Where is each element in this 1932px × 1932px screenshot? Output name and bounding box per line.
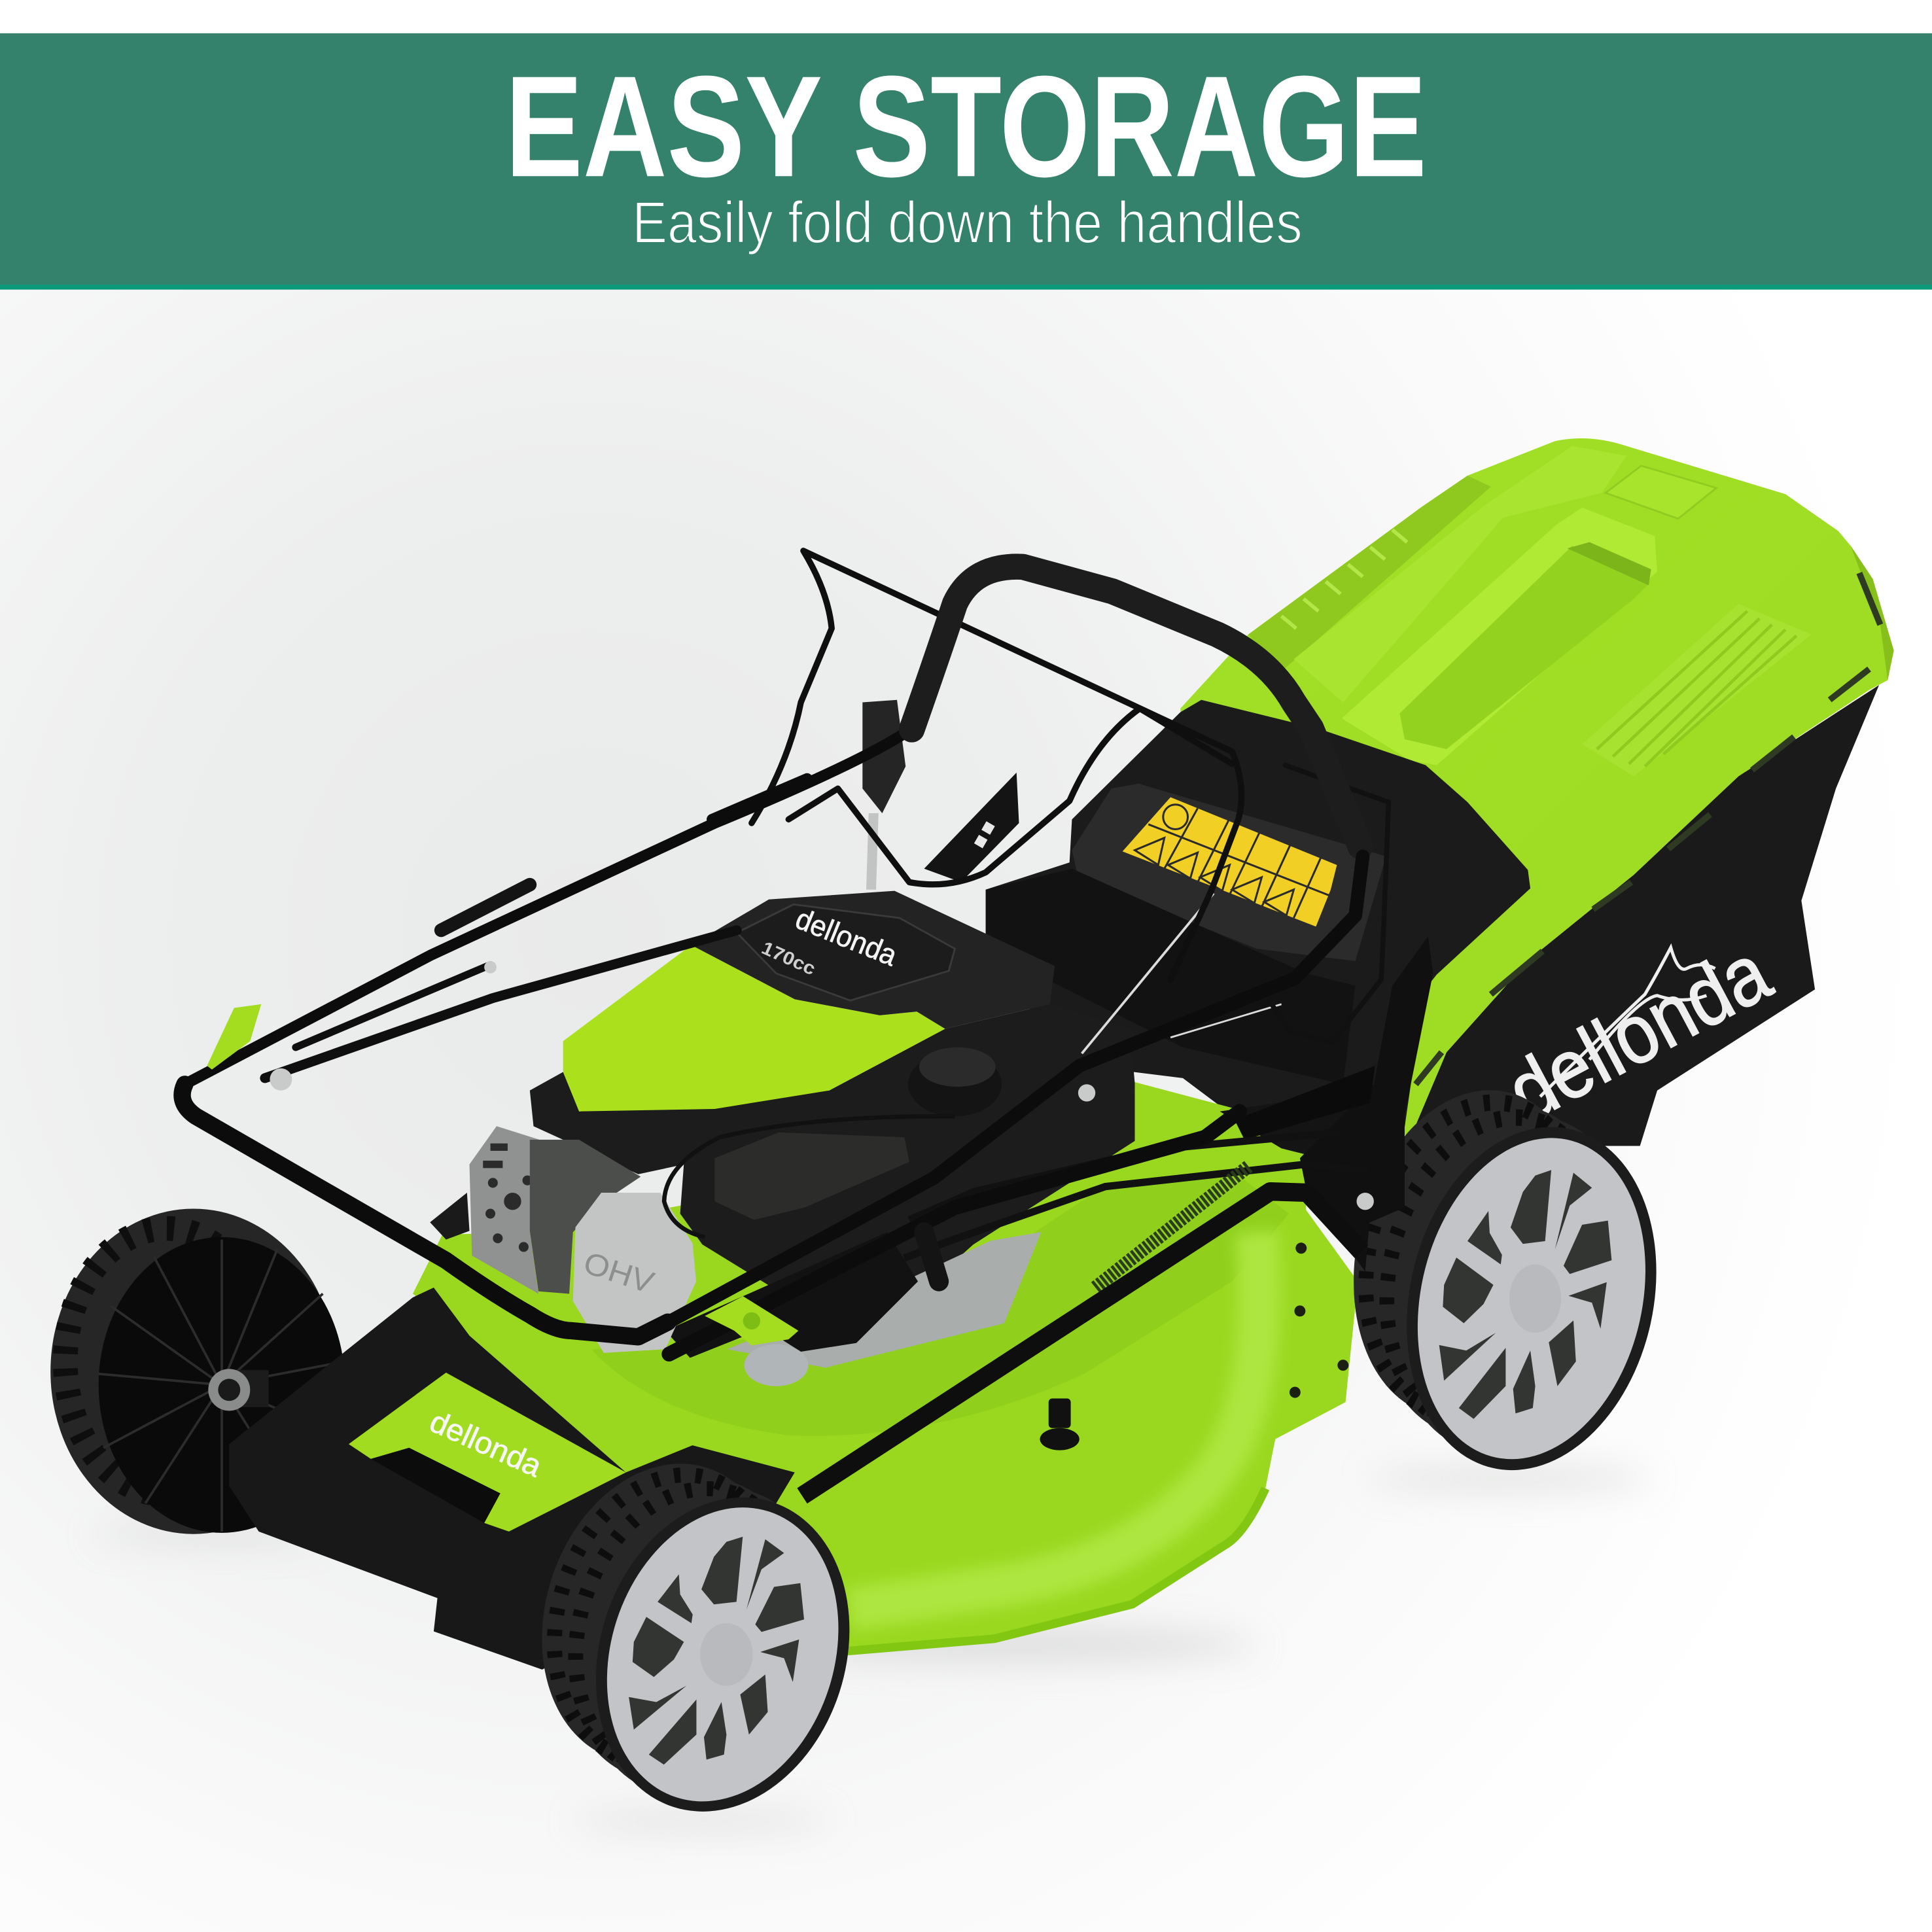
hood capacity label: 170cc	[759, 937, 819, 979]
warning sticker	[1123, 797, 1337, 926]
control box	[665, 1232, 918, 1358]
operator bail	[752, 551, 1242, 979]
padded top bar	[912, 567, 1360, 847]
bumper logo: dellonda	[425, 1403, 548, 1484]
bag lid tab	[1606, 466, 1716, 519]
grass bag	[1180, 438, 1894, 1146]
front tyre	[504, 1433, 867, 1829]
water port	[1040, 1399, 1080, 1450]
rear sidewall	[1368, 1091, 1695, 1507]
adjuster stalk	[862, 700, 905, 813]
lower handle loop	[182, 1084, 668, 1337]
front spoke windows	[629, 1537, 804, 1765]
drive bail	[788, 709, 1232, 885]
engine	[430, 891, 1135, 1386]
handle latch	[441, 885, 530, 930]
deck holes	[1290, 1242, 1348, 1398]
lime levers	[207, 1004, 798, 1346]
small front wheel	[53, 1211, 345, 1533]
rear tyre	[1317, 1057, 1674, 1489]
front right wheel	[504, 1433, 889, 1845]
engine: OHV	[580, 1245, 659, 1300]
header banner	[0, 0, 1932, 290]
bag side shade	[1851, 546, 1894, 680]
rear hub cap	[1509, 1265, 1561, 1333]
bag vents	[1582, 604, 1811, 776]
rear hub	[1382, 1105, 1681, 1492]
engine lime cover	[563, 945, 945, 1112]
inner side rail A	[664, 856, 1363, 1325]
handle recess	[1399, 546, 1650, 749]
bag slots	[1416, 573, 1880, 1084]
handle arm plate	[1235, 1066, 1375, 1140]
outer wire loop	[1269, 765, 1388, 1042]
front bumper	[229, 1288, 795, 1670]
rear tread	[1331, 1071, 1640, 1460]
folded handle assembly	[182, 551, 1388, 1354]
bumper hollow	[371, 1448, 501, 1523]
engine base	[530, 1004, 1135, 1343]
ground shadow	[92, 1467, 1651, 1830]
chassis bracket and side plates	[862, 700, 1433, 1272]
upper handle rail	[184, 721, 922, 1084]
front sidewall	[557, 1464, 889, 1845]
bag logo: dellonda	[1492, 925, 1785, 1140]
logo swoosh	[1540, 947, 1715, 1097]
rear spoke windows	[1439, 1170, 1611, 1419]
subtitle: Easily fold down the handles	[632, 190, 1303, 256]
bolts	[270, 961, 1374, 1210]
deck	[413, 1082, 1358, 1651]
bag lime shell	[1180, 438, 1894, 1140]
bag ribbed side	[1248, 476, 1491, 671]
lower deck bar	[802, 1191, 1361, 1496]
front tread	[519, 1446, 832, 1802]
OHV block	[573, 1193, 696, 1353]
front hub cap	[700, 1623, 753, 1686]
air filter box	[714, 1133, 909, 1220]
rear black housing	[986, 700, 1530, 1140]
bag carry handle	[1342, 508, 1657, 765]
mower	[53, 438, 1894, 1845]
bag mesh collector	[1409, 685, 1879, 1146]
deck well	[591, 1170, 1289, 1436]
bag upper trough	[1293, 446, 1626, 702]
clamp arm	[712, 779, 807, 819]
hood panel	[737, 904, 955, 1000]
housing grille	[986, 869, 1356, 1084]
second rail	[265, 930, 737, 1078]
heat guard	[470, 1126, 563, 1293]
left lump	[430, 1193, 470, 1240]
engine black hood	[692, 891, 1055, 1029]
bumper badge	[349, 1373, 626, 1532]
sticker recess	[1072, 784, 1386, 961]
deck bright band	[850, 1232, 1259, 1609]
rear wheel	[1317, 1057, 1695, 1507]
cylinder head	[530, 1140, 641, 1293]
deck lower rim	[848, 1488, 1265, 1651]
axle	[224, 1370, 269, 1407]
fuel cap	[908, 1052, 1002, 1116]
wheel disc	[99, 1237, 345, 1533]
cables and spring	[664, 893, 1367, 1288]
recoil housing	[727, 1232, 1041, 1367]
inner side rail B	[669, 1112, 1240, 1354]
title: EASY STORAGE	[505, 46, 1427, 207]
cable clip	[924, 1232, 939, 1282]
front hub	[571, 1477, 875, 1832]
hood logo: dellonda	[791, 902, 902, 972]
solenoid	[745, 1344, 808, 1386]
